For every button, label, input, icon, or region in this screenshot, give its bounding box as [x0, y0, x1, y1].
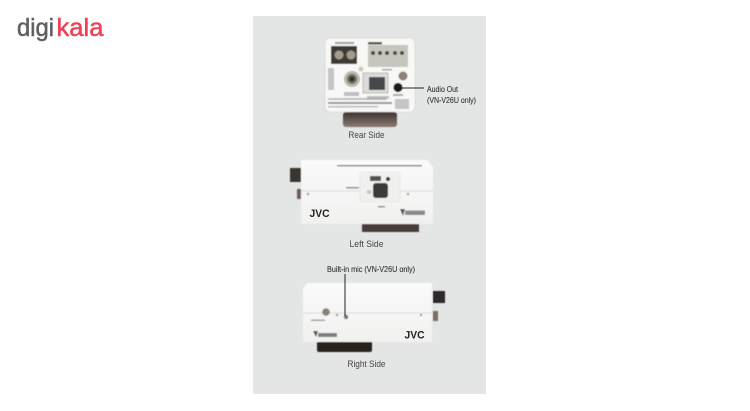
label: right side: Right Side [348, 359, 386, 369]
reset button [386, 177, 390, 181]
screws [307, 193, 309, 195]
label: left side: Left Side [350, 239, 384, 249]
body [301, 160, 433, 224]
ethernet port [363, 73, 388, 93]
label: audio out: (VN-V26U only) [427, 95, 476, 105]
label: built-in mic: Built-in mic (VN-V26U only) [327, 264, 415, 274]
status led [367, 190, 371, 194]
logo: digikala: kala [56, 14, 104, 42]
tiny labels [337, 165, 422, 166]
network mark [313, 331, 337, 337]
tiny label marks [328, 68, 409, 109]
body [325, 38, 415, 112]
logo: digikala [17, 14, 104, 42]
small connector [433, 311, 438, 321]
monitor out connector [344, 66, 364, 87]
logo: jvc left: JVC [310, 208, 330, 220]
label: audio out [427, 84, 476, 105]
rear connector [290, 168, 301, 182]
small connector [297, 189, 301, 199]
arrow: audio out leader line [400, 87, 424, 89]
panel: camera views background [253, 16, 486, 394]
mic hole [344, 315, 348, 319]
label: audio out: Audio Out [427, 84, 459, 94]
network mark [400, 209, 425, 216]
body [303, 283, 432, 342]
alarm knob [398, 72, 408, 80]
logo: digikala: digi [17, 14, 54, 42]
lens ring [317, 341, 372, 352]
camera: right side [303, 283, 445, 352]
screws [336, 314, 338, 316]
tiny label [311, 320, 325, 321]
label: rear side: Rear Side [348, 130, 384, 140]
audio out jack [393, 83, 403, 92]
control recess [360, 172, 400, 202]
rear connector [433, 291, 445, 303]
lens ring [343, 112, 397, 127]
iris knob [373, 183, 388, 198]
lens ring [362, 223, 419, 232]
af lock knob [322, 308, 330, 316]
switch [370, 176, 381, 181]
arrow: mic leader line [344, 274, 346, 316]
alarm terminal block [368, 42, 408, 67]
power terminal block [331, 42, 357, 64]
logo: jvc right: JVC [404, 330, 425, 342]
camera: left side [290, 160, 433, 232]
camera: rear side [325, 38, 415, 127]
